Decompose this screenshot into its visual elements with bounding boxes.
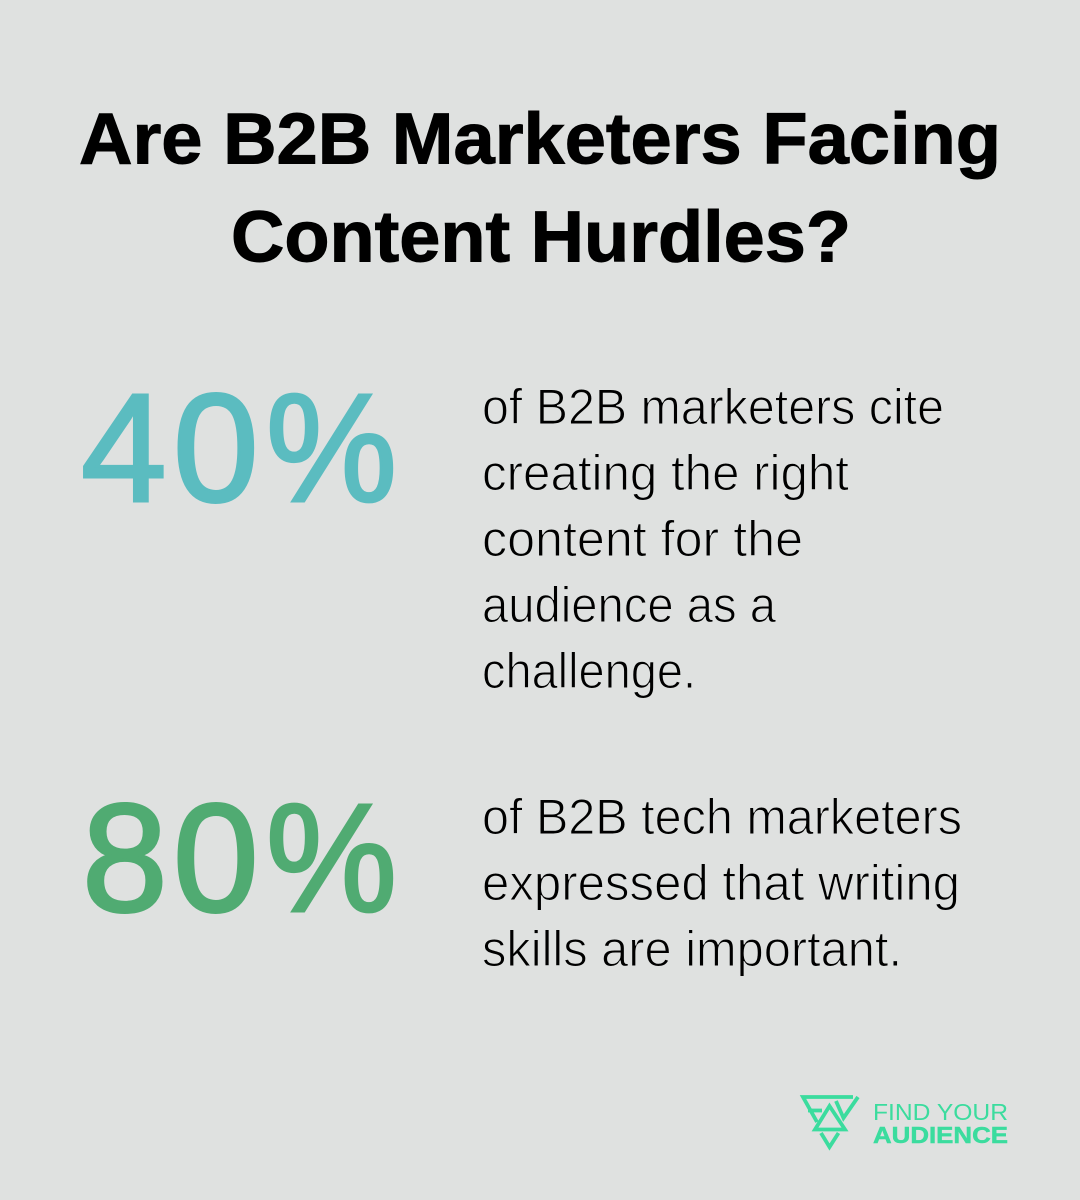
text block: 40% description: creating the right	[482, 445, 849, 501]
text block: 40% description: audience as a	[482, 577, 776, 633]
wordmark: FIND YOUR	[873, 1099, 1008, 1125]
text block: 40% description	[482, 379, 944, 699]
stat: 80%: 80	[82, 772, 259, 944]
text block: 40% description: content for the	[482, 511, 803, 567]
wordmark	[873, 1099, 1008, 1148]
text block: 80% description: of B2B tech marketers	[482, 789, 962, 845]
text block: 80% description: skills are important.	[482, 921, 902, 977]
icon: triangle logo mark	[803, 1097, 858, 1147]
logo: Find Your Audience	[803, 1097, 1008, 1148]
text block: 80% description	[482, 789, 962, 977]
stat: 40%: 40	[81, 362, 259, 534]
stat: 40%	[81, 362, 397, 534]
title: Are B2B Marketers Facing	[79, 100, 1001, 180]
title	[79, 100, 1001, 278]
stat: 40%: %	[266, 362, 397, 534]
text block: 40% description: of B2B marketers cite	[482, 379, 944, 435]
text block: 40% description: challenge.	[482, 643, 696, 699]
wordmark: AUDIENCE	[873, 1122, 1008, 1148]
text block: 80% description: expressed that writing	[482, 855, 960, 911]
stat: 80%	[82, 772, 397, 944]
stat: 80%: %	[266, 772, 397, 944]
title: Content Hurdles?	[231, 198, 851, 278]
